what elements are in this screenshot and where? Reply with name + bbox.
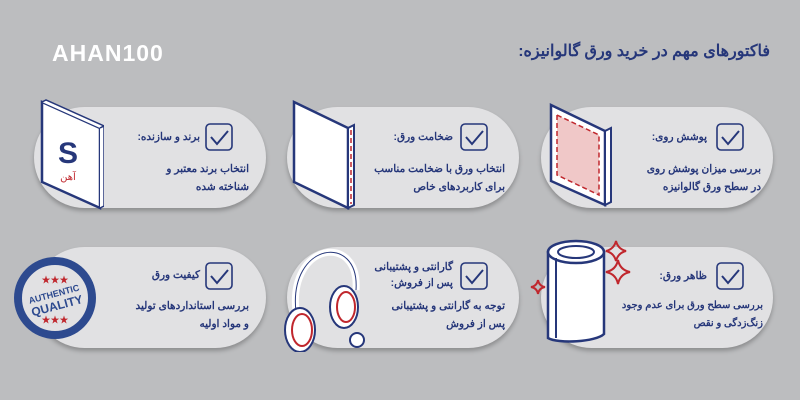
text: بررسی میزان پوشش روی: [647, 163, 761, 175]
text: [135, 300, 249, 330]
text: [374, 163, 505, 193]
heading: ضخامت ورق:: [393, 131, 453, 143]
text: انتخاب برند معتبر و: [166, 163, 249, 175]
icon: brand box: S: [58, 137, 78, 170]
title: فاکتورهای مهم در خرید ورق گالوانیزه:: [518, 43, 770, 60]
panel: appearance: [541, 247, 773, 348]
text: و مواد اولیه: [199, 318, 249, 330]
icon: coil with sparkles: [530, 240, 630, 343]
checkbox: [716, 262, 744, 290]
icon: quality stamp: AUTHENTIC: [28, 282, 81, 306]
panel: coating: [541, 107, 773, 208]
logo: AHAN100: [52, 40, 164, 66]
icon: quality stamp: QUALITY: [30, 292, 84, 319]
text: [622, 300, 763, 329]
text: انتخاب ورق با ضخامت مناسب: [374, 163, 505, 175]
heading: کیفیت ورق: [152, 269, 200, 281]
heading: گارانتی و پشتیبانی: [374, 261, 453, 273]
icon: sheet thickness: [292, 100, 355, 210]
text: بررسی استانداردهای تولید: [135, 300, 249, 312]
checkbox: [205, 262, 233, 290]
heading: ظاهر ورق:: [659, 270, 707, 282]
heading: پوشش روی:: [652, 131, 707, 143]
icon: brand box: آهن: [60, 170, 77, 183]
panel: warranty: [287, 247, 519, 348]
icon: quality stamp: ★★★: [41, 315, 69, 325]
text: [647, 163, 761, 193]
text: در سطح ورق گالوانیزه: [663, 181, 761, 193]
text: توجه به گارانتی و پشتیبانی: [392, 300, 505, 312]
heading: برند و سازنده:: [137, 131, 200, 143]
icon: headphones: [284, 248, 365, 352]
heading: [374, 260, 454, 289]
text: [392, 299, 505, 330]
checkbox: [205, 123, 233, 151]
text: [166, 163, 249, 193]
panel: brand: [34, 107, 266, 208]
checkbox: [460, 262, 488, 290]
text: بررسی سطح ورق برای عدم وجود: [622, 300, 763, 311]
panel: quality: [34, 247, 266, 348]
panel: thickness: [287, 107, 519, 208]
icon: coating sheet: [550, 103, 612, 207]
checkbox: [716, 123, 744, 151]
icon: brand box: [40, 99, 104, 210]
icon: quality stamp: [14, 257, 96, 339]
text: برای کاربردهای خاص: [413, 181, 505, 193]
checkbox: [460, 123, 488, 151]
heading: پس از فروش:: [391, 277, 453, 289]
text: پس از فروش: [446, 318, 505, 330]
text: شناخته شده: [196, 181, 249, 193]
icon: quality stamp: ★★★: [41, 275, 69, 285]
text: زنگ‌زدگی و نقص: [694, 318, 763, 329]
